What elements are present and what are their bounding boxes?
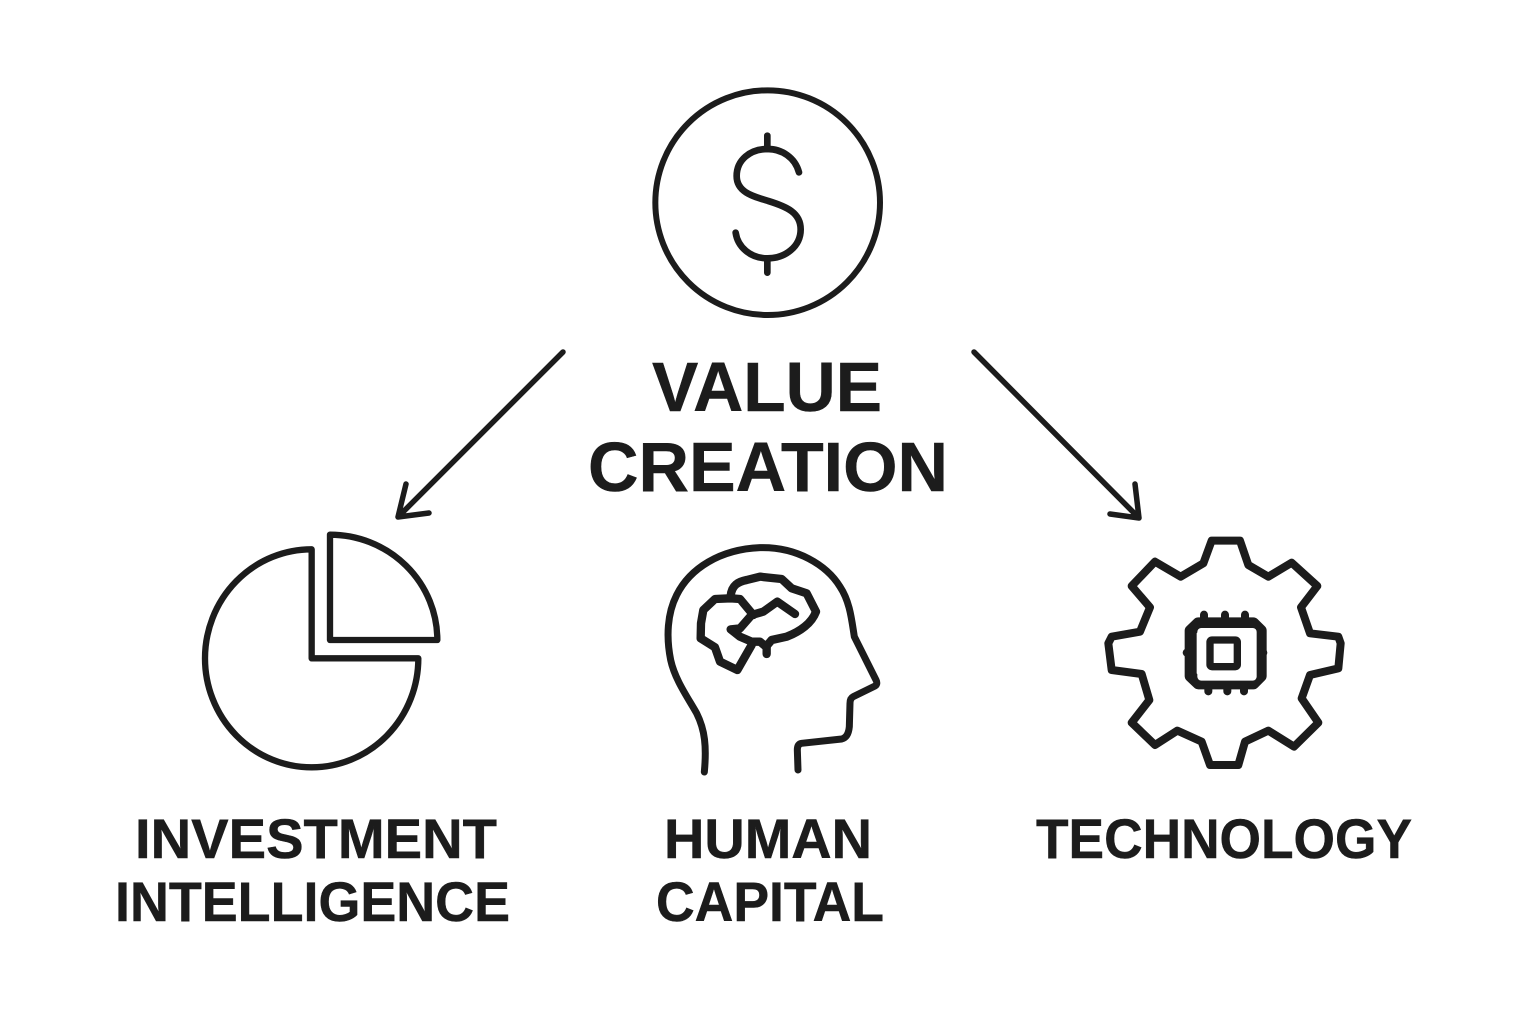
- title: value creation: CREATION: [588, 428, 948, 506]
- label: human capital: HUMAN: [664, 807, 872, 870]
- label: investment intelligence: INTELLIGENCE: [115, 870, 510, 933]
- icon: dollar coin: [655, 90, 880, 315]
- arrow: to investment intelligence: [398, 352, 563, 517]
- label: investment intelligence: [115, 807, 510, 933]
- label: human capital: CAPITAL: [656, 870, 884, 933]
- arrow: to technology: [974, 352, 1139, 518]
- title: value creation: [588, 348, 948, 506]
- label: human capital: [656, 807, 884, 933]
- label: technology: TECHNOLOGY: [1036, 807, 1412, 870]
- icon: pie chart: [205, 535, 437, 767]
- icon: head with brain: [668, 548, 877, 772]
- icon: gear with chip: [1108, 541, 1341, 765]
- label: investment intelligence: INVESTMENT: [135, 807, 497, 870]
- title: value creation: VALUE: [652, 348, 882, 426]
